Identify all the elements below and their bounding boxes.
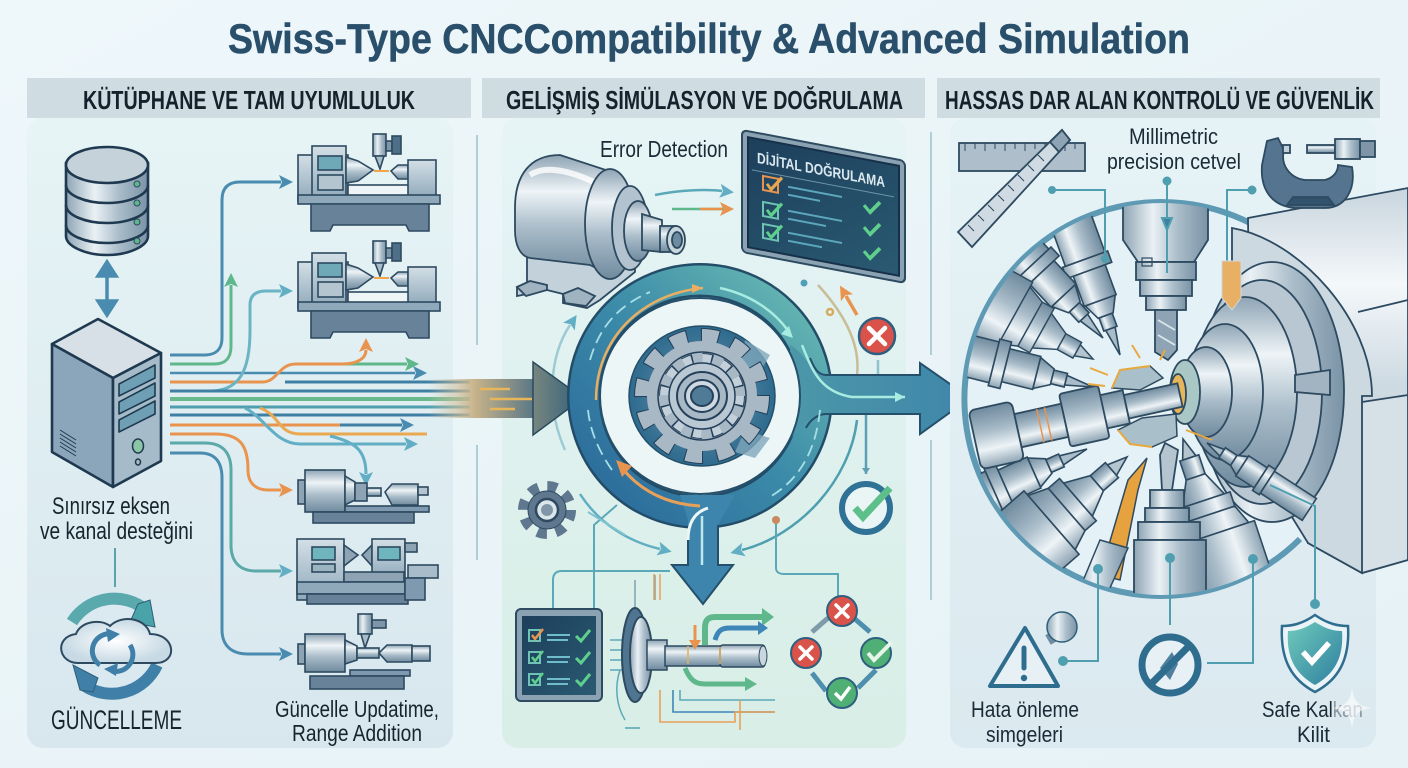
title: Swiss-Type CNCCompatibility & Advanced Simulation (228, 15, 1190, 62)
heading: library: KÜTÜPHANE VE TAM UYUMLULUK (83, 85, 415, 115)
panel: library and compatibility (27, 78, 471, 748)
icon: spindle motor (515, 155, 685, 308)
icon: error cross (859, 318, 895, 354)
icon: verification cycle (791, 596, 892, 708)
flow lines from server to machines (170, 182, 470, 654)
icon: micrometer (1262, 138, 1375, 208)
text: unlimited axis support: Sınırsız eksen (52, 493, 170, 520)
text: unlimited axis support (40, 493, 193, 545)
text: update time, range addition (275, 696, 439, 746)
text: millimetric precision: precision cetvel (1107, 149, 1241, 174)
text: error prevention icons: simgeleri (986, 722, 1063, 747)
text: error detection: Error Detection (600, 136, 728, 162)
icon: machine 2 (298, 241, 440, 338)
tool overlapping chuck (1199, 430, 1317, 522)
text: error prevention icons: Hata önleme (971, 697, 1079, 722)
monitor: digital verification (742, 130, 905, 283)
icon: cloud update (61, 599, 171, 694)
icon: check circle (842, 484, 890, 532)
connector lines in lower section (553, 505, 838, 608)
icon: prohibition sign (1142, 637, 1198, 693)
simulation ring (584, 280, 970, 604)
arrow: orange insertion (1222, 261, 1241, 310)
icon: machine 4 (297, 539, 438, 604)
icon: small gear (525, 488, 569, 532)
workpiece shaft (968, 382, 1184, 470)
text: millimetric precision: Millimetric (1129, 124, 1218, 149)
heading: library (27, 78, 471, 118)
text: update time, range addition: Güncelle Updatime, (275, 696, 439, 722)
icon: server tower (52, 319, 161, 487)
icon: safety shield (1282, 615, 1348, 692)
checklist rows (763, 174, 880, 260)
icon: gear inside ring (629, 326, 775, 466)
arrows: motor and monitor exchange (655, 190, 725, 209)
main arrow band into simulation (428, 362, 583, 435)
icon: warning and probe (990, 612, 1077, 686)
chuck (1170, 262, 1344, 522)
checklist panel (516, 609, 602, 701)
icon: ruler (958, 130, 1085, 247)
text: digital verification: DİJİTAL DOĞRULAMA (757, 149, 885, 191)
text: update label: GÜNCELLEME (51, 705, 182, 735)
heading: simulation: GELİŞMİŞ SİMÜLASYON VE DOĞRULAMA (506, 85, 903, 115)
orange blade tool (1083, 458, 1148, 588)
vertical top tool (1123, 200, 1208, 360)
arrow: database to server (98, 262, 116, 315)
text: safe shield lock (1262, 697, 1363, 747)
icon: workpiece with flow arrows (610, 574, 775, 730)
text: safe shield lock: Kilit (1297, 722, 1330, 747)
icon: database (66, 147, 148, 255)
icon: sparkle watermark (1332, 688, 1372, 728)
vertical bottom tool (1134, 443, 1206, 600)
machine housing (1232, 188, 1408, 573)
gripping jaws and sparks (1112, 366, 1177, 447)
arrows: left and right orbit paths (552, 280, 878, 550)
panel: simulation and verification (428, 78, 970, 748)
text: update time, range addition: Range Addition (292, 720, 422, 746)
icon: machine 5 (298, 614, 430, 689)
tools (1054, 216, 1121, 356)
text: unlimited axis support: ve kanal desteğini (40, 518, 193, 545)
text: error prevention icons (971, 697, 1079, 747)
icon: machine 3 (298, 470, 429, 523)
icon: machine 1 (298, 134, 440, 231)
panel: narrow-area control and safety (937, 78, 1408, 748)
heading: simulation (482, 78, 925, 118)
callout lines (1049, 178, 1319, 665)
lens view of tools (961, 187, 1408, 599)
text: millimetric precision (1107, 124, 1241, 174)
text: safe shield lock: Safe Kalkan (1262, 697, 1363, 722)
